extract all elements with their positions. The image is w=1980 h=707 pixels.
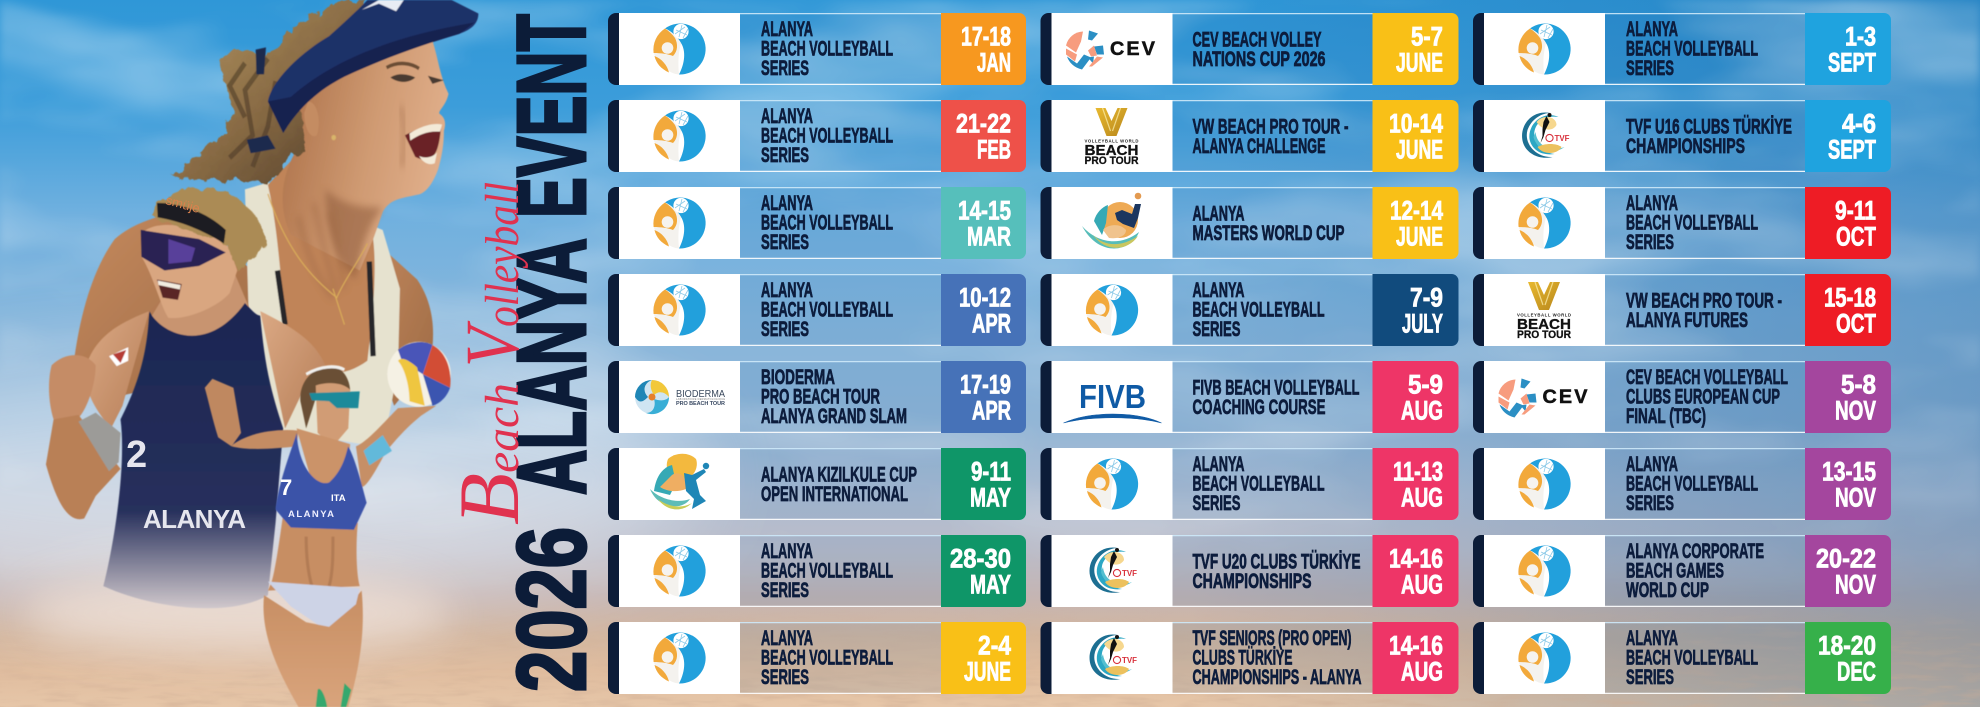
event name: CLUBS EUROPEAN CUP bbox=[1626, 386, 1780, 408]
event name bbox=[1192, 550, 1360, 593]
event: Alanya Beach Volleyball Series, 7-9 July bbox=[1040, 274, 1458, 346]
logo: Alanya series bbox=[1518, 198, 1571, 249]
date badge: 4-6 Sept: 4-6 bbox=[1842, 108, 1876, 138]
date badge: 10-14 June bbox=[1372, 100, 1458, 172]
date badge: 17-19 Apr: 17-19 bbox=[960, 370, 1011, 400]
date badge: 14-16 Aug: 14-16 bbox=[1389, 544, 1443, 574]
event name: ALANYA GRAND SLAM bbox=[761, 405, 907, 428]
date badge: 9-11 May: 9-11 bbox=[971, 456, 1011, 486]
event name: BIODERMA bbox=[761, 366, 835, 389]
event name: NATIONS CUP 2026 bbox=[1192, 48, 1326, 71]
date badge: 14-15 Mar bbox=[941, 187, 1026, 259]
event name: ALANYA bbox=[1626, 453, 1678, 476]
logo: Alanya series bbox=[1086, 459, 1138, 510]
kit label: ALANYA on female player: ALANYA bbox=[288, 509, 334, 520]
event: Alanya Beach Volleyball Series, 17-18 Jan bbox=[608, 13, 1026, 85]
logo: Bioderma Pro Beach Tour: LABORATOIRE DERMATOLOGIQUE bbox=[676, 398, 725, 401]
date badge: 9-11 Oct: OCT bbox=[1836, 222, 1876, 252]
event name: VW BEACH PRO TOUR - bbox=[1192, 116, 1349, 138]
event name: SERIES bbox=[761, 666, 809, 689]
event name bbox=[761, 105, 893, 167]
logo: Alanya series bbox=[653, 24, 706, 75]
logo: Alanya series bbox=[653, 285, 706, 336]
event name: BEACH VOLLEYBALL bbox=[1626, 646, 1758, 670]
event name: SERIES bbox=[1192, 318, 1240, 341]
date badge: 1-3 Sept: 1-3 bbox=[1845, 22, 1876, 52]
date badge: 5-7 June: JUNE bbox=[1396, 48, 1443, 78]
event: Alanya Beach Volleyball Series, 2-4 June bbox=[608, 622, 1026, 694]
date badge: 13-15 Nov: 13-15 bbox=[1822, 456, 1876, 486]
date badge: 18-20 Dec: 18-20 bbox=[1818, 630, 1876, 660]
event: CEV Beach Volley Nations Cup 2026, 5-7 June bbox=[1040, 13, 1458, 85]
date badge: 11-13 Aug: 11-13 bbox=[1393, 456, 1443, 486]
logo: Alanya series bbox=[653, 198, 706, 249]
event name bbox=[761, 192, 893, 254]
title: 2026 ALANYA EVENT bbox=[497, 14, 606, 692]
date badge: 5-8 Nov: 5-8 bbox=[1841, 370, 1876, 400]
date badge: 5-9 Aug: 5-9 bbox=[1408, 370, 1443, 400]
logo: CEV bbox=[1498, 378, 1590, 418]
event name: VW BEACH PRO TOUR - bbox=[1626, 290, 1782, 312]
event name: ALANYA bbox=[1626, 192, 1678, 215]
event name: ALANYA bbox=[1626, 627, 1678, 650]
date badge: 14-16 Aug: AUG bbox=[1401, 656, 1443, 686]
date badge: 17-18 Jan: JAN bbox=[977, 48, 1011, 78]
event name: ALANYA bbox=[761, 192, 813, 215]
event name bbox=[1192, 453, 1325, 515]
logo: Beach Pro Tour bbox=[1517, 282, 1571, 341]
logo: TVF bbox=[1090, 634, 1137, 680]
date badge: 18-20 Dec bbox=[1805, 622, 1891, 694]
event name bbox=[761, 540, 893, 602]
event name: BEACH VOLLEYBALL bbox=[1626, 38, 1758, 60]
date badge: 4-6 Sept: SEPT bbox=[1828, 134, 1876, 164]
event: FIVB Beach Volleyball Coaching Course, 5-9 Aug bbox=[1040, 361, 1458, 433]
event name: COACHING COURSE bbox=[1192, 396, 1326, 419]
logo: Bioderma Pro Beach Tour: PRO BEACH TOUR bbox=[676, 401, 725, 407]
headband text: smüje bbox=[164, 192, 202, 216]
athlete: female player with ball, ITA kit bbox=[205, 367, 436, 707]
event: Alanya Beach Volleyball Series, 1-3 Sept bbox=[1473, 13, 1891, 85]
event name: SERIES bbox=[1192, 492, 1240, 515]
event name: SERIES bbox=[1626, 666, 1674, 689]
date badge: 14-16 Aug: 14-16 bbox=[1389, 630, 1443, 660]
event name: OPEN INTERNATIONAL bbox=[761, 483, 908, 506]
event name bbox=[1192, 279, 1325, 341]
event name: ALANYA bbox=[761, 105, 813, 128]
event name: SERIES bbox=[761, 579, 809, 602]
event name bbox=[1626, 18, 1758, 80]
date badge: 17-18 Jan bbox=[941, 13, 1026, 85]
logo: FIVB: FIVB bbox=[1079, 378, 1146, 415]
date badge: 17-19 Apr: APR bbox=[972, 396, 1011, 426]
event name: BEACH VOLLEYBALL bbox=[761, 646, 893, 670]
event name: PRO BEACH TOUR bbox=[761, 386, 880, 408]
event name bbox=[1626, 116, 1792, 158]
kit label: ITA: ITA bbox=[331, 493, 346, 504]
date badge: 12-14 June: JUNE bbox=[1396, 222, 1443, 252]
event name bbox=[1626, 453, 1758, 515]
event name: ALANYA FUTURES bbox=[1626, 309, 1748, 332]
kit number 7: 7 bbox=[280, 475, 292, 500]
date badge: 14-16 Aug: AUG bbox=[1401, 570, 1443, 600]
event name bbox=[761, 366, 907, 428]
event name: SERIES bbox=[1626, 492, 1674, 515]
event name: ALANYA bbox=[1192, 453, 1244, 476]
date badge: 1-3 Sept bbox=[1805, 13, 1891, 85]
date badge: 21-22 Feb: 21-22 bbox=[956, 108, 1011, 138]
event name: TVF U16 CLUBS TÜRKİYE bbox=[1626, 116, 1792, 138]
event: CEV Beach Volleyball Clubs European Cup Final, 5-8 Nov bbox=[1473, 361, 1891, 433]
event name bbox=[761, 279, 893, 341]
event name bbox=[761, 627, 893, 689]
logo: Alanya series bbox=[1518, 459, 1571, 510]
event name: CHAMPIONSHIPS - ALANYA bbox=[1192, 666, 1362, 689]
event: Alanya Beach Volleyball Series, 11-13 Aug bbox=[1040, 448, 1458, 520]
event: TVF U20 Clubs Türkiye Championships, 14-16 Aug bbox=[1040, 535, 1458, 607]
date badge: 18-20 Dec: DEC bbox=[1837, 656, 1876, 686]
logo: Bioderma Pro Beach Tour bbox=[635, 380, 725, 414]
date badge: 20-22 Nov: NOV bbox=[1835, 570, 1876, 600]
logo: Bioderma Pro Beach Tour: BIODERMA bbox=[676, 388, 725, 400]
date badge: 14-15 Mar: MAR bbox=[967, 222, 1011, 252]
title: 2026 ALANYA EVENT: 2026 bbox=[497, 527, 606, 692]
event: Alanya Beach Volleyball Series, 18-20 Dec bbox=[1473, 622, 1891, 694]
event name: FIVB BEACH VOLLEYBALL bbox=[1192, 376, 1360, 400]
date badge: 1-3 Sept: SEPT bbox=[1828, 48, 1876, 78]
event: Alanya Beach Volleyball Series, 14-15 Mar bbox=[608, 187, 1026, 259]
date badge: 7-9 July: 7-9 bbox=[1410, 282, 1443, 312]
event: Alanya Beach Volleyball Series, 21-22 Feb bbox=[608, 100, 1026, 172]
date badge: 5-9 Aug bbox=[1372, 361, 1458, 433]
icon: volleyball held by the female player bbox=[387, 342, 451, 407]
event name bbox=[1192, 202, 1344, 245]
date badge: 11-13 Aug bbox=[1372, 448, 1458, 520]
event: Alanya Beach Volleyball Series, 10-12 Apr bbox=[608, 274, 1026, 346]
event name bbox=[1626, 290, 1782, 332]
date badge: 20-22 Nov: 20-22 bbox=[1816, 544, 1876, 574]
event name: BEACH VOLLEYBALL bbox=[761, 212, 893, 234]
date badge: 10-12 Apr bbox=[941, 274, 1026, 346]
event name: SERIES bbox=[1626, 57, 1674, 80]
athlete: large woman shouting, navy visor bbox=[75, 0, 478, 444]
event: VW Beach Pro Tour Alanya Challenge, 10-14 June bbox=[1040, 100, 1458, 172]
athletes collage bbox=[23, 0, 478, 707]
event name: ALANYA bbox=[1626, 18, 1678, 41]
event name: ALANYA bbox=[761, 18, 813, 41]
event name: CLUBS TÜRKİYE bbox=[1192, 646, 1292, 670]
event name bbox=[1626, 192, 1758, 254]
event name bbox=[1626, 627, 1758, 689]
date badge: 14-15 Mar: 14-15 bbox=[958, 196, 1011, 226]
event name: BEACH GAMES bbox=[1626, 560, 1724, 582]
date badge: 9-11 May bbox=[941, 448, 1026, 520]
date badge: 10-12 Apr: APR bbox=[972, 308, 1011, 338]
date badge: 9-11 May: MAY bbox=[970, 482, 1011, 512]
date badge: 2-4 June bbox=[941, 622, 1026, 694]
date badge: 12-14 June: 12-14 bbox=[1390, 196, 1443, 226]
date badge: 20-22 Nov bbox=[1805, 535, 1891, 607]
script heading: Beach Volleyball: Volleyball bbox=[451, 182, 535, 367]
date badge: 5-7 June bbox=[1372, 13, 1458, 85]
logo: TVF bbox=[1090, 547, 1137, 593]
date badge: 2-4 June: 2-4 bbox=[978, 630, 1011, 660]
event name: BEACH VOLLEYBALL bbox=[761, 560, 893, 582]
date badge: 9-11 Oct: 9-11 bbox=[1835, 196, 1876, 226]
date badge: 14-16 Aug bbox=[1372, 622, 1458, 694]
event name bbox=[1626, 366, 1788, 428]
date badge: 5-8 Nov: NOV bbox=[1835, 396, 1876, 426]
logo: Alanya series bbox=[1518, 24, 1571, 75]
date badge: 28-30 May: MAY bbox=[970, 570, 1011, 600]
event name: SERIES bbox=[761, 318, 809, 341]
date badge: 11-13 Aug: AUG bbox=[1401, 482, 1443, 512]
event name: TVF U20 CLUBS TÜRKİYE bbox=[1192, 550, 1360, 574]
date badge: 5-7 June: 5-7 bbox=[1411, 22, 1443, 52]
jersey number 2: 2 bbox=[126, 434, 147, 476]
date badge: 17-18 Jan: 17-18 bbox=[961, 22, 1011, 52]
date badge: 14-16 Aug bbox=[1372, 535, 1458, 607]
date badge: 15-18 Oct: 15-18 bbox=[1824, 282, 1876, 312]
date badge: 2-4 June: JUNE bbox=[964, 656, 1011, 686]
event name: ALANYA bbox=[761, 627, 813, 650]
logo: Masters World Cup bbox=[1082, 193, 1141, 249]
event name: BEACH VOLLEYBALL bbox=[761, 124, 893, 148]
event: Bioderma Pro Beach Tour Alanya Grand Slam, 17-19 Apr bbox=[608, 361, 1026, 433]
date badge: 9-11 Oct bbox=[1805, 187, 1891, 259]
script heading: Beach Volleyball bbox=[441, 182, 537, 525]
event name: BEACH VOLLEYBALL bbox=[1192, 298, 1325, 322]
event: Alanya Beach Volleyball Series, 9-11 Oct bbox=[1473, 187, 1891, 259]
event name: CEV BEACH VOLLEY bbox=[1192, 28, 1322, 52]
event name: ALANYA bbox=[761, 279, 813, 302]
event name: ALANYA KIZILKULE CUP bbox=[761, 464, 917, 486]
event name: ALANYA bbox=[1192, 202, 1244, 226]
event name bbox=[761, 464, 917, 506]
logo: Alanya series bbox=[653, 546, 706, 597]
date badge: 7-9 July: JULY bbox=[1402, 308, 1443, 338]
logo: Alanya series bbox=[653, 633, 706, 684]
date badge: 21-22 Feb: FEB bbox=[977, 134, 1011, 164]
date badge: 10-14 June: JUNE bbox=[1396, 134, 1443, 164]
event name: BEACH VOLLEYBALL bbox=[761, 38, 893, 60]
event: Alanya Masters World Cup, 12-14 June bbox=[1040, 187, 1458, 259]
event name: CHAMPIONSHIPS bbox=[1192, 570, 1312, 593]
logo: Alanya series bbox=[653, 111, 706, 162]
event name: MASTERS WORLD CUP bbox=[1192, 222, 1344, 245]
event: Alanya Beach Volleyball Series, 13-15 Nov bbox=[1473, 448, 1891, 520]
event: Alanya Corporate Beach Games World Cup, 20-22 Nov bbox=[1473, 535, 1891, 607]
event name: CEV BEACH VOLLEYBALL bbox=[1626, 366, 1788, 389]
date badge: 5-8 Nov bbox=[1805, 361, 1891, 433]
date badge: 4-6 Sept bbox=[1805, 100, 1891, 172]
event name: TVF SENIORS (PRO OPEN) bbox=[1192, 627, 1352, 650]
script heading: Beach Volleyball: Beach bbox=[441, 383, 537, 525]
event name: FINAL (TBC) bbox=[1626, 405, 1706, 428]
logo: Alanya series bbox=[1086, 285, 1138, 336]
event name: BEACH VOLLEYBALL bbox=[761, 298, 893, 322]
logo: Alanya series bbox=[1518, 633, 1571, 684]
logo: FIVB bbox=[1064, 378, 1162, 423]
event name: BEACH VOLLEYBALL bbox=[1626, 212, 1758, 234]
logo: Alanya series bbox=[1518, 546, 1571, 597]
jersey label: ALANYA on male player: ALANYA bbox=[143, 504, 246, 534]
athlete: male player in navy ALANYA jersey bbox=[46, 188, 325, 608]
date badge: 28-30 May: 28-30 bbox=[950, 544, 1011, 574]
date badge: 10-14 June: 10-14 bbox=[1389, 108, 1443, 138]
event name: CHAMPIONSHIPS bbox=[1626, 135, 1745, 158]
event name bbox=[1192, 376, 1360, 419]
event: TVF Seniors Clubs Türkiye Championships Alanya, 14-16 Aug bbox=[1040, 622, 1458, 694]
date badge: 21-22 Feb bbox=[941, 100, 1026, 172]
logo: TVF bbox=[1522, 112, 1570, 158]
event name: WORLD CUP bbox=[1626, 579, 1709, 602]
event name bbox=[1192, 28, 1326, 71]
logo: Beach Pro Tour bbox=[1084, 108, 1139, 167]
logo: Kizilkule Cup bbox=[650, 454, 709, 509]
event name: BEACH VOLLEYBALL bbox=[1192, 472, 1325, 496]
event name: ALANYA CHALLENGE bbox=[1192, 135, 1326, 158]
event name: SERIES bbox=[761, 57, 809, 80]
event: Alanya Kizilkule Cup Open International, 9-11 May bbox=[608, 448, 1026, 520]
event name: ALANYA bbox=[1192, 279, 1244, 302]
date badge: 7-9 July bbox=[1372, 274, 1458, 346]
event name bbox=[1192, 627, 1362, 689]
date badge: 28-30 May bbox=[941, 535, 1026, 607]
date badge: 13-15 Nov: NOV bbox=[1835, 482, 1876, 512]
event name: ALANYA CORPORATE bbox=[1626, 540, 1764, 563]
logo: CEV bbox=[1066, 30, 1157, 70]
date badge: 12-14 June bbox=[1372, 187, 1458, 259]
date badge: 15-18 Oct: OCT bbox=[1836, 308, 1876, 338]
event name bbox=[761, 18, 893, 80]
date badge: 17-19 Apr bbox=[941, 361, 1026, 433]
date badge: 13-15 Nov bbox=[1805, 448, 1891, 520]
event: TVF U16 Clubs Türkiye Championships, 4-6 Sept bbox=[1473, 100, 1891, 172]
date badge: 15-18 Oct bbox=[1805, 274, 1891, 346]
title: 2026 ALANYA EVENT: ALANYA bbox=[497, 238, 606, 495]
event name: SERIES bbox=[761, 144, 809, 167]
event name bbox=[1626, 540, 1764, 602]
event: Alanya Beach Volleyball Series, 28-30 May bbox=[608, 535, 1026, 607]
event name bbox=[1192, 116, 1349, 158]
date badge: 5-9 Aug: AUG bbox=[1401, 396, 1443, 426]
event name: ALANYA bbox=[761, 540, 813, 563]
event name: BEACH VOLLEYBALL bbox=[1626, 472, 1758, 496]
event: VW Beach Pro Tour Alanya Futures, 15-18 Oct bbox=[1473, 274, 1891, 346]
event name: SERIES bbox=[1626, 231, 1674, 254]
date badge: 10-12 Apr: 10-12 bbox=[959, 282, 1011, 312]
event name: SERIES bbox=[761, 231, 809, 254]
